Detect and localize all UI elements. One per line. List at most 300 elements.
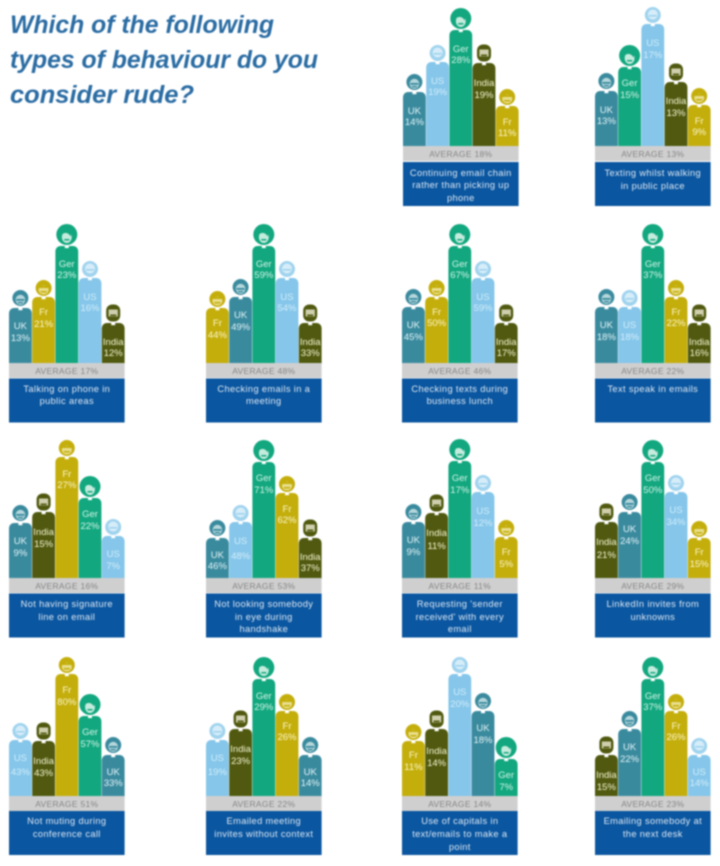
bar: Ger 22%: 22% xyxy=(80,521,100,532)
bar: India 23%: 23% xyxy=(231,756,251,767)
average band xyxy=(206,796,322,811)
caption: Not looking somebody xyxy=(214,599,313,609)
caption: Not having signature xyxy=(21,599,113,609)
average band: AVERAGE 16% xyxy=(35,581,99,591)
average band xyxy=(9,363,125,378)
caption xyxy=(206,378,322,422)
bar: UK 33% xyxy=(102,737,125,802)
caption: LinkedIn invites from xyxy=(606,599,699,609)
bar: US 16%: 16% xyxy=(80,303,100,314)
average band: AVERAGE 51% xyxy=(35,799,99,809)
bar: Fr 26%: 26% xyxy=(666,732,686,743)
bar: UK 33%: 33% xyxy=(104,778,123,789)
bar: India 43%: 43% xyxy=(34,768,54,779)
average band xyxy=(9,796,125,811)
caption xyxy=(9,594,125,638)
bar: UK 49%: 49% xyxy=(231,322,251,333)
bar: US 17%: 17% xyxy=(643,50,663,61)
bar: Ger 29% xyxy=(252,657,275,802)
bar: UK 9%: UK xyxy=(407,535,421,546)
bar: US 34%: 34% xyxy=(666,517,686,528)
bar: Ger 17%: 17% xyxy=(450,485,470,496)
bar: India 14%: 14% xyxy=(427,758,447,769)
bar: India 19%: India xyxy=(474,78,495,89)
bar: India 33%: India xyxy=(300,337,321,348)
caption: meeting xyxy=(246,396,282,406)
bar: US 18%: US xyxy=(623,320,636,331)
bar: Fr 26% xyxy=(276,694,298,802)
average band xyxy=(206,578,322,593)
bar: Fr 26%: Fr xyxy=(283,721,291,732)
bar: UK 13%: 13% xyxy=(597,116,616,127)
bar: Ger 29%: 29% xyxy=(254,702,274,713)
bar: UK 24%: 24% xyxy=(620,536,640,547)
title xyxy=(10,11,318,109)
panel: checking emails in a meeting xyxy=(206,224,322,422)
bar: UK 46%: UK xyxy=(211,550,225,561)
caption: text/emails to make a xyxy=(412,829,508,839)
bar: India 14%: India xyxy=(426,746,448,757)
bar: Ger 7%: 7% xyxy=(499,782,514,793)
bar: UK 18%: 18% xyxy=(597,332,616,343)
bar: UK 24%: UK xyxy=(623,524,637,535)
bar: Fr 27% xyxy=(55,440,78,584)
caption: handshake xyxy=(239,624,288,634)
bar: Fr 44%: Fr xyxy=(213,318,222,329)
caption: Text speak in emails xyxy=(607,384,698,394)
bar: UK 13%: UK xyxy=(14,321,28,332)
caption xyxy=(403,162,519,206)
bar: Fr 11% xyxy=(402,724,425,802)
bar: Ger 67%: 67% xyxy=(450,270,470,281)
caption: Use of capitals in xyxy=(421,816,498,826)
bar: India 16% xyxy=(688,304,711,369)
bar: UK 13%: UK xyxy=(600,105,614,116)
bar: UK 9%: 9% xyxy=(14,548,28,559)
average band: AVERAGE 13% xyxy=(621,149,685,159)
bar: US 54%: US xyxy=(280,292,294,303)
bar: Ger 28% xyxy=(449,8,472,152)
caption: the next desk xyxy=(623,829,683,839)
bar: US 19%: 19% xyxy=(208,767,227,778)
panel: requesting sender received xyxy=(402,439,518,638)
caption xyxy=(595,811,711,855)
bar: Fr 50%: Fr xyxy=(432,307,441,318)
bar: US 19%: US xyxy=(211,753,224,764)
bar: Ger 15%: 15% xyxy=(620,90,640,101)
average band xyxy=(9,578,125,593)
bar: US 34% xyxy=(665,475,687,584)
average band: AVERAGE 22% xyxy=(621,366,685,376)
bar: UK 14% xyxy=(299,737,322,802)
bar: UK 24% xyxy=(618,494,641,584)
caption xyxy=(402,811,518,855)
bar: UK 18%: 18% xyxy=(473,735,493,746)
caption: Talking on phone in xyxy=(23,384,110,394)
bar: UK 14%: UK xyxy=(304,767,317,778)
panel: emailed meeting invites xyxy=(206,657,322,855)
bar: Fr 22% xyxy=(665,280,687,369)
bar: Ger 57%: 57% xyxy=(80,739,100,750)
bar: India 37%: 37% xyxy=(301,563,320,574)
bar: Fr 80%: 80% xyxy=(57,697,77,708)
bar: US 43%: 43% xyxy=(11,767,30,778)
bar: US 17%: US xyxy=(646,38,659,49)
bar: Ger 59%: 59% xyxy=(254,270,274,281)
caption: Emailing somebody at xyxy=(604,816,702,826)
bar: India 16%: India xyxy=(689,337,710,348)
bar: India 13% xyxy=(665,64,687,152)
bar: Ger 22% xyxy=(79,476,101,584)
bar: Ger 71% xyxy=(252,440,275,584)
caption xyxy=(206,811,322,855)
bar: India 19%: 19% xyxy=(474,90,494,101)
bar: Ger 71%: Ger xyxy=(256,473,272,484)
bar: Fr 11%: 11% xyxy=(404,762,423,773)
bar: India 33% xyxy=(299,304,322,369)
bar: Fr 44% xyxy=(206,291,229,369)
bar: UK 46%: 46% xyxy=(208,561,227,572)
bar: Ger 37%: 37% xyxy=(643,702,663,713)
caption: line on email xyxy=(38,612,95,622)
title: consider rude? xyxy=(10,81,194,109)
bar: Fr 27%: 27% xyxy=(57,480,77,491)
caption: Not muting during xyxy=(27,816,106,826)
bar: Fr 62%: 62% xyxy=(277,515,297,526)
bar: US 20%: 20% xyxy=(450,699,470,710)
bar: UK 13%: 13% xyxy=(11,333,30,344)
caption xyxy=(595,162,711,206)
bar: Fr 80%: Fr xyxy=(62,685,71,696)
caption: Texting whilst walking xyxy=(605,168,701,178)
bar: India 43% xyxy=(32,722,55,802)
average band xyxy=(595,796,711,811)
bar: Ger 67%: Ger xyxy=(452,259,468,270)
bar: US 14%: US xyxy=(693,767,706,778)
bar: US 59% xyxy=(472,261,494,369)
bar: Fr 22%: Fr xyxy=(672,307,680,318)
bar: Ger 15%: Ger xyxy=(622,78,638,89)
bar: India 17%: 17% xyxy=(497,348,516,359)
bar: Fr 21%: Fr xyxy=(39,307,48,318)
bar: Ger 23%: 23% xyxy=(57,270,77,281)
caption: Requesting 'sender xyxy=(417,599,503,609)
bar: Fr 62% xyxy=(276,476,298,584)
caption xyxy=(402,378,518,422)
bar: US 54%: 54% xyxy=(277,303,297,314)
bar: UK 18% xyxy=(472,693,494,802)
caption: in public place xyxy=(621,181,685,191)
bar: Fr 9%: 9% xyxy=(692,127,707,138)
bar: Ger 17%: Ger xyxy=(452,473,468,484)
bar: UK 9% xyxy=(402,504,425,584)
bar: Ger 50% xyxy=(641,440,664,584)
bar: US 43% xyxy=(9,723,32,802)
bar: India 15% xyxy=(595,736,618,802)
bar: India 15%: 15% xyxy=(34,539,54,550)
bar: US 48%: 48% xyxy=(231,551,251,562)
bar: Ger 7% xyxy=(495,737,518,802)
average band xyxy=(595,578,711,593)
bar: India 15%: India xyxy=(596,770,617,781)
caption xyxy=(206,594,322,638)
bar: US 12%: US xyxy=(476,506,490,517)
average band xyxy=(402,578,518,593)
bar: US 14%: 14% xyxy=(690,778,709,789)
caption: Emailed meeting xyxy=(227,816,301,826)
bar: Ger 57% xyxy=(79,694,101,802)
bar: Fr 5%: 5% xyxy=(499,559,514,570)
bar: US 34%: US xyxy=(669,505,683,516)
panel: continuing email chain xyxy=(403,8,519,206)
bar: Fr 9%: Fr xyxy=(695,116,704,127)
average band: AVERAGE 23% xyxy=(621,799,685,809)
bar: UK 9%: UK xyxy=(14,536,28,547)
bar: UK 45%: 45% xyxy=(404,332,423,343)
bar: Ger 67% xyxy=(448,224,471,369)
bar: UK 49%: UK xyxy=(234,310,248,321)
bar: UK 14%: UK xyxy=(408,106,422,117)
bar: Ger 23% xyxy=(55,224,78,369)
caption: phone xyxy=(447,193,475,203)
title: types of behaviour do you xyxy=(10,46,318,74)
bar: UK 22%: 22% xyxy=(620,754,640,765)
bar: India 15% xyxy=(32,494,55,584)
bar: US 12%: 12% xyxy=(473,518,493,529)
average band xyxy=(402,796,518,811)
caption: Continuing email chain xyxy=(410,168,512,178)
bar: US 19% xyxy=(426,45,449,152)
panel: not looking in eye xyxy=(206,440,322,638)
bar: India 17% xyxy=(495,304,518,369)
average band: AVERAGE 11% xyxy=(429,581,491,591)
bar: India 43%: India xyxy=(33,756,55,767)
average band: AVERAGE 48% xyxy=(232,366,296,376)
average band: AVERAGE 22% xyxy=(232,799,296,809)
bar: US 48% xyxy=(229,505,252,584)
bar: UK 18%: UK xyxy=(476,723,490,734)
average band xyxy=(595,146,711,161)
bar: India 23%: India xyxy=(230,744,252,755)
bar: UK 22% xyxy=(618,711,641,802)
title: Which of the following xyxy=(10,11,274,39)
bar: US 14% xyxy=(688,738,711,802)
panel: linkedin invites xyxy=(595,440,711,638)
bar: Fr 50%: 50% xyxy=(427,318,447,329)
bar: US 19% xyxy=(206,723,229,802)
average band xyxy=(206,363,322,378)
bar: India 16%: 16% xyxy=(690,348,709,359)
caption: business lunch xyxy=(427,396,493,406)
bar: Fr 5%: Fr xyxy=(502,547,511,558)
bar: US 16%: US xyxy=(83,292,97,303)
bar: US 19%: 19% xyxy=(428,87,448,98)
bar: Ger 17% xyxy=(448,439,471,584)
caption xyxy=(595,378,711,422)
bar: Fr 26% xyxy=(665,694,687,802)
bar: India 12%: India xyxy=(103,337,124,348)
average band xyxy=(403,146,519,161)
caption: point xyxy=(449,842,471,852)
bar: UK 9% xyxy=(9,505,32,584)
bar: UK 46% xyxy=(206,520,229,584)
caption xyxy=(9,378,125,422)
bar: Ger 37%: Ger xyxy=(645,691,661,702)
bar: Ger 37% xyxy=(641,657,664,802)
bar: US 20% xyxy=(448,657,471,802)
caption xyxy=(402,594,518,638)
bar: UK 45% xyxy=(402,289,425,369)
bar: US 16% xyxy=(79,261,101,369)
bar: Fr 21% xyxy=(32,280,55,369)
bar: UK 45%: UK xyxy=(407,320,421,331)
caption: Checking texts during xyxy=(411,384,508,394)
bar: India 37%: India xyxy=(300,552,321,563)
panel: text speak in emails xyxy=(595,224,711,422)
bar: Fr 15%: Fr xyxy=(695,547,704,558)
bar: Fr 9% xyxy=(688,88,711,152)
bar: Ger 50%: Ger xyxy=(645,473,661,484)
caption xyxy=(9,811,125,855)
bar: US 7%: US xyxy=(107,549,120,560)
bar: US 12% xyxy=(472,475,494,584)
average band: AVERAGE 14% xyxy=(428,799,492,809)
bar: UK 13% xyxy=(595,73,618,152)
bar: UK 18% xyxy=(595,289,618,369)
caption: unknowns xyxy=(630,612,675,622)
bar: Fr 80% xyxy=(55,657,78,802)
bar: UK 18%: UK xyxy=(600,320,614,331)
bar: India 13%: India xyxy=(666,96,687,107)
panel: no signature line xyxy=(9,440,125,638)
bar: Ger 37% xyxy=(641,224,664,369)
bar: UK 33%: UK xyxy=(107,767,120,778)
bar: Fr 26%: Fr xyxy=(672,721,680,732)
bar: India 15%: India xyxy=(33,527,55,538)
bar: Fr 62%: Fr xyxy=(283,504,291,515)
panel: use of capitals xyxy=(402,657,518,855)
bar: UK 13% xyxy=(9,290,32,369)
bar: Ger 57%: Ger xyxy=(82,727,98,738)
caption: in eye during xyxy=(235,612,293,622)
bar: US 7%: 7% xyxy=(106,561,121,572)
bar: Fr 50% xyxy=(425,280,448,369)
bar: India 13%: 13% xyxy=(666,108,686,119)
bar: Ger 29%: Ger xyxy=(256,691,272,702)
bar: India 14% xyxy=(425,710,448,802)
caption: rather than picking up xyxy=(412,180,509,190)
caption xyxy=(595,594,711,638)
average band: AVERAGE 18% xyxy=(429,149,493,159)
bar: India 11%: India xyxy=(426,528,448,539)
bar: India 33%: 33% xyxy=(301,348,320,359)
average band: AVERAGE 17% xyxy=(35,366,99,376)
bar: UK 14% xyxy=(403,74,426,152)
bar: UK 49% xyxy=(229,279,252,369)
panel: texting whilst walking xyxy=(595,7,711,206)
bar: India 23% xyxy=(229,710,252,802)
bar: US 59%: US xyxy=(476,292,490,303)
bar: Ger 23%: Ger xyxy=(59,259,75,270)
bar: UK 14%: 14% xyxy=(405,117,424,128)
bar: India 12% xyxy=(102,304,125,369)
average band: AVERAGE 29% xyxy=(621,581,685,591)
caption: email xyxy=(448,624,472,634)
bar: India 15%: 15% xyxy=(597,782,616,793)
bar: Fr 26%: 26% xyxy=(277,732,297,743)
average band: AVERAGE 46% xyxy=(428,366,492,376)
bar: UK 9%: 9% xyxy=(407,547,421,558)
bar: Fr 15%: 15% xyxy=(690,559,709,570)
average band: AVERAGE 53% xyxy=(232,581,296,591)
bar: Fr 27%: Fr xyxy=(62,469,71,480)
bar: Ger 28%: Ger xyxy=(453,44,469,55)
bar: Ger 22%: Ger xyxy=(82,509,98,520)
panel: emailing somebody at next desk xyxy=(595,657,711,855)
bar: India 37% xyxy=(299,520,322,584)
bar: US 54% xyxy=(276,261,298,369)
bar: India 11%: 11% xyxy=(427,541,446,552)
bar: US 7% xyxy=(102,519,125,584)
bar: India 12%: 12% xyxy=(104,348,123,359)
bar: Ger 59% xyxy=(252,224,275,369)
bar: Ger 59%: Ger xyxy=(256,259,272,270)
bar: US 48%: US xyxy=(234,536,247,547)
caption: public areas xyxy=(40,396,94,406)
bar: Fr 5% xyxy=(495,520,518,584)
bar: Ger 71%: 71% xyxy=(254,485,274,496)
bar: US 19%: US xyxy=(431,76,444,87)
bar: US 17% xyxy=(641,7,664,152)
bar: Fr 22%: 22% xyxy=(666,318,686,329)
bar: Fr 44%: 44% xyxy=(208,330,227,341)
bar: India 21% xyxy=(595,504,618,584)
bar: Ger 15% xyxy=(618,45,641,152)
bar: Ger 37%: 37% xyxy=(643,270,663,281)
bar: Fr 11%: 11% xyxy=(498,128,517,139)
caption: invites without context xyxy=(214,829,313,839)
panel: not muting during conference call xyxy=(9,657,125,855)
bar: Fr 21%: 21% xyxy=(34,319,54,330)
bar: India 21%: 21% xyxy=(597,550,616,561)
bar: UK 22%: UK xyxy=(623,742,637,753)
bar: US 18% xyxy=(618,290,641,369)
caption: Checking emails in a xyxy=(217,384,311,394)
bar: US 18%: 18% xyxy=(620,332,640,343)
panel: checking texts during lunch xyxy=(402,224,518,422)
bar: Ger 37%: Ger xyxy=(645,259,661,270)
bar: Ger 50%: 50% xyxy=(643,485,663,496)
bar: Ger 7%: Ger xyxy=(498,770,514,781)
panel: talking on phone xyxy=(9,224,125,422)
bar: UK 14%: 14% xyxy=(301,778,320,789)
bar: Fr 15% xyxy=(688,521,711,584)
bar: US 59%: 59% xyxy=(473,303,493,314)
bar: India 19% xyxy=(473,44,495,152)
bar: Ger 28%: 28% xyxy=(451,55,471,66)
bar: India 21%: India xyxy=(596,537,617,548)
caption: conference call xyxy=(33,829,101,839)
average band xyxy=(402,363,518,378)
bar: US 20%: US xyxy=(453,687,466,698)
bar: Fr 11%: Fr xyxy=(503,117,512,128)
caption: received' with every xyxy=(416,612,504,622)
bar: India 17%: India xyxy=(496,337,517,348)
bar: US 43%: US xyxy=(14,753,27,764)
bar: Fr 11%: Fr xyxy=(409,750,418,761)
average band xyxy=(595,363,711,378)
bar: Fr 11% xyxy=(496,89,519,152)
